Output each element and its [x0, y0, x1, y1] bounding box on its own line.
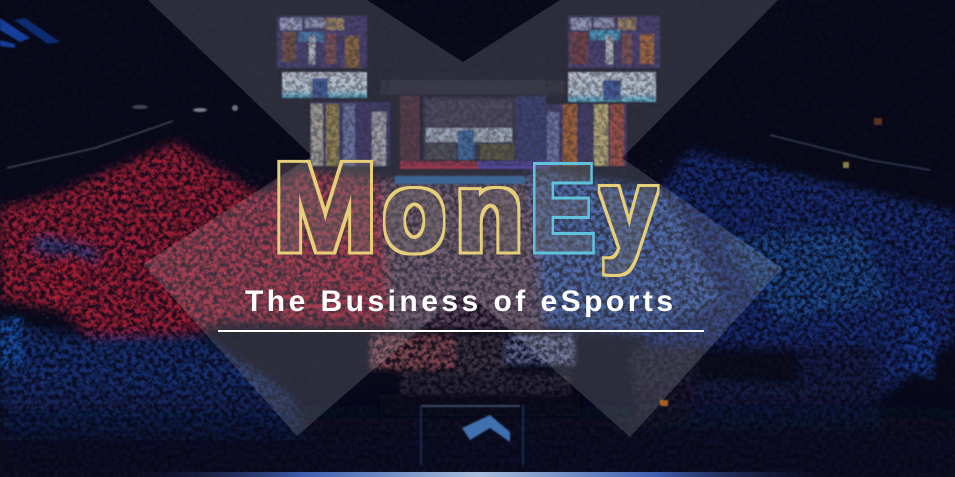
screen texture	[277, 16, 660, 166]
crowd speckle texture	[0, 136, 955, 477]
bottom stage glow strip	[130, 472, 830, 477]
title: MonEy: E	[530, 140, 595, 276]
jumbotron: left	[277, 16, 390, 166]
title: MonEy: M	[274, 138, 377, 276]
jumbotron: right	[545, 16, 660, 166]
crowd colour regions	[0, 142, 955, 477]
translucent X shape overlay	[143, 0, 782, 437]
centre stage and seating	[0, 250, 935, 416]
centre screen	[380, 80, 565, 184]
title: MonEy: n	[456, 150, 523, 274]
title: MonEy: y	[601, 147, 656, 274]
title: MonEy: o	[383, 150, 445, 274]
subtitle: The Business of eSports	[245, 285, 673, 318]
divider rule	[218, 330, 704, 332]
